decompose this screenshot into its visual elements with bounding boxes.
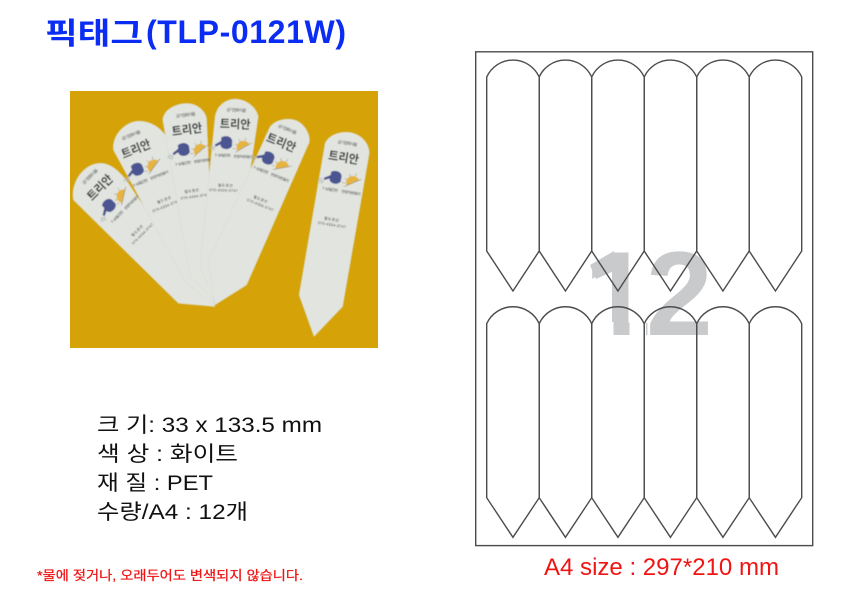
photo tag 3: 공기정화식물 bbox=[175, 110, 196, 120]
photo tag 3: 7~10일간만 bbox=[175, 160, 192, 167]
photo tag 5: 반양지/반음지 bbox=[270, 171, 290, 183]
photo tag 6: single tag on the right: 월도권선 bbox=[324, 215, 339, 223]
photo tag 2: 반양지/반음지 bbox=[149, 169, 169, 181]
top row of 6 tag outlines bbox=[487, 60, 802, 291]
photo tag 3: 반양지/반음지 bbox=[194, 157, 213, 164]
photo tag 1: 트리안 bbox=[84, 172, 116, 203]
specification text bbox=[97, 414, 322, 524]
bottom row of 6 tag outlines bbox=[487, 307, 802, 537]
photo tag 5: 7~10일간만 bbox=[252, 164, 270, 175]
photo tag 5: 월도권선 bbox=[253, 194, 268, 204]
photo tag 2 bbox=[108, 121, 215, 307]
photo tag 6: single tag on the right: 070-4334-3747 bbox=[318, 221, 346, 229]
photo tag 6: single tag on the right: 공기정화식물 bbox=[337, 138, 358, 148]
photo tag 2: 월도권선 bbox=[156, 195, 172, 205]
cover patches removing the foot of the numeral 1 bbox=[580, 322, 646, 337]
flag of the numeral 1 bbox=[590, 251, 614, 279]
photo tag 5: 공기정화식물 bbox=[277, 122, 298, 136]
photo tag 1: 월도권선 bbox=[130, 224, 144, 238]
photo tag 1: 반양지/반음지 bbox=[123, 194, 140, 211]
photo tag 1: 7~10일간만 bbox=[109, 209, 125, 224]
photo tag 2: 공기정화식물 bbox=[121, 128, 142, 142]
specification text: 색 상 : 화이트 bbox=[97, 443, 238, 466]
photo tag 4: 반양지/반음지 bbox=[234, 154, 253, 159]
large quantity number: 12 bbox=[584, 227, 713, 361]
photo tag 3: 트리안 bbox=[171, 121, 203, 139]
note: waterproof: *물에 젖거나, 오래두어도 변색되지 않습니다. bbox=[37, 568, 303, 583]
title: 픽태그 bbox=[45, 18, 143, 51]
photo tag 4: 월도권선 bbox=[218, 182, 233, 188]
photo tag 5: 070-4334-3747 bbox=[246, 198, 274, 212]
photo tag 3: 월도권선 bbox=[184, 187, 199, 194]
photo tag 5: 트리안 bbox=[264, 131, 298, 155]
specification text: 수량/A4 : 12개 bbox=[97, 501, 248, 524]
photo tag 6: single tag on the right: 트리안 bbox=[327, 148, 360, 167]
photo tag 3 bbox=[161, 103, 218, 303]
title bbox=[45, 14, 346, 51]
A4 sheet diagram bbox=[476, 52, 813, 546]
photo tag 2: 070-4334-3747 bbox=[152, 199, 180, 213]
photo tag 3: 070-4334-3747 bbox=[180, 193, 209, 201]
photo tag 4: 트리안 bbox=[220, 117, 251, 132]
title: (TLP-0121W) bbox=[146, 14, 346, 50]
photo tag 1: 공기정화식물 bbox=[80, 167, 100, 186]
photo tag 4: 070-4334-3747 bbox=[209, 188, 238, 193]
photo tag 4: 7~10일간만 bbox=[215, 152, 231, 158]
photo tag 4 bbox=[200, 99, 258, 305]
sheet outline bbox=[476, 52, 813, 546]
photo tag 6: single tag on the right: 7~10일간만 bbox=[322, 185, 339, 193]
photo tag 5 bbox=[208, 117, 310, 305]
specification text: 재 질 : PET bbox=[97, 472, 213, 495]
photo tag 1: 070-4334-3747 bbox=[131, 223, 154, 246]
photo tag 6: single tag on the right: 반양지/반음지 bbox=[341, 189, 361, 197]
photo tag 6: single tag on the right bbox=[299, 132, 369, 337]
photo: fan of plant tags on yellow background bbox=[70, 91, 378, 348]
photo tag 2: 트리안 bbox=[119, 137, 153, 162]
specification text: 크 기: 33 x 133.5 mm bbox=[97, 414, 322, 437]
A4 size caption: A4 size : 297*210 mm bbox=[544, 554, 779, 581]
photo tag 2: 7~10일간만 bbox=[132, 177, 149, 188]
photo tag 4: 공기정화식물 bbox=[226, 106, 246, 114]
photo tag 1 bbox=[71, 159, 215, 307]
